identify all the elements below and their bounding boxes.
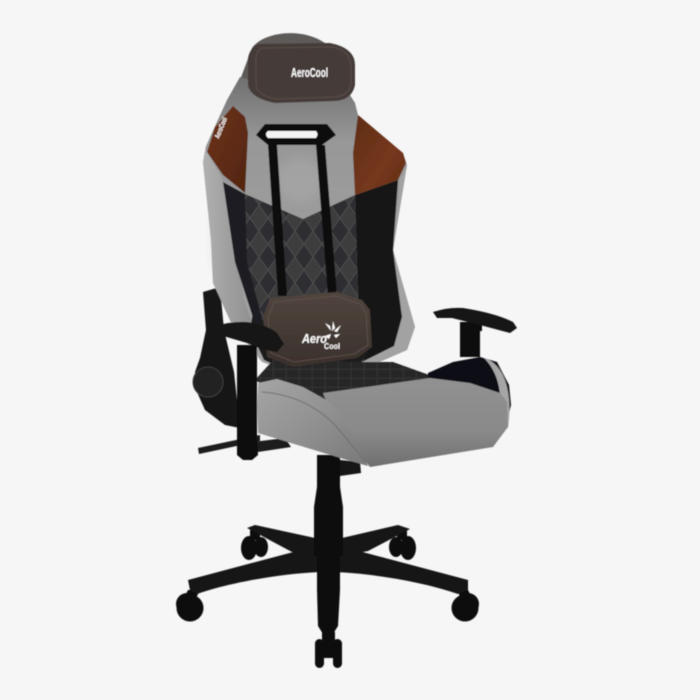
head pillow: [248, 43, 355, 103]
head pillow logo: AeroCool: [291, 66, 328, 80]
bolster seam: [262, 392, 366, 462]
rear left caster: [241, 530, 268, 560]
rear left leg: [247, 525, 315, 556]
icon: leaf logo: [325, 321, 341, 339]
left front caster: [176, 590, 204, 622]
lumbar logo sub text: Cool: [324, 342, 340, 351]
right front caster: [452, 590, 479, 622]
seat: [255, 357, 511, 467]
left seat bolster: [257, 379, 368, 466]
backrest: [203, 33, 415, 372]
harness strap left: [268, 145, 287, 296]
front leg: [317, 546, 340, 634]
harness strap right: [316, 145, 337, 296]
left brown wing: [207, 106, 248, 193]
right front leg: [336, 546, 468, 594]
recline mechanism: [193, 287, 240, 428]
tilt lever: [198, 435, 291, 454]
right arm pad: [433, 308, 517, 333]
seat mount: [340, 460, 361, 476]
harness loop: [256, 124, 336, 145]
headrest rear: [240, 33, 340, 88]
front caster: [315, 632, 342, 668]
right side bolster: [375, 165, 415, 364]
fabric mottling: [213, 158, 324, 276]
left arm post: [237, 345, 258, 460]
seat quilted rear: [255, 358, 432, 415]
left black panel: [223, 182, 262, 330]
gas lift column: [314, 455, 343, 556]
right armrest: [433, 308, 517, 357]
dark base behind lumbar: [250, 300, 374, 372]
rear right leg: [342, 525, 410, 556]
lumbar pillow: [263, 292, 372, 367]
right bolster trim: [484, 358, 509, 428]
rear right caster: [389, 530, 416, 560]
diamond quilted panel: [245, 194, 358, 320]
seat cushion: [323, 378, 508, 467]
right arm post: [460, 322, 482, 357]
right brown wing: [353, 115, 406, 195]
right black panel: [355, 180, 402, 362]
left front leg: [188, 546, 320, 594]
right seat bolster: [428, 357, 511, 430]
lumbar logo text: Aero: [301, 331, 327, 346]
chair artwork: [176, 33, 517, 668]
wing logo: AeroCool: [213, 116, 229, 140]
left armrest: [213, 322, 284, 460]
left side bolster: [203, 150, 258, 340]
backrest shell: [203, 77, 415, 372]
harness slot: [266, 131, 318, 138]
star base with casters: [176, 525, 479, 668]
left arm pad: [213, 322, 284, 352]
